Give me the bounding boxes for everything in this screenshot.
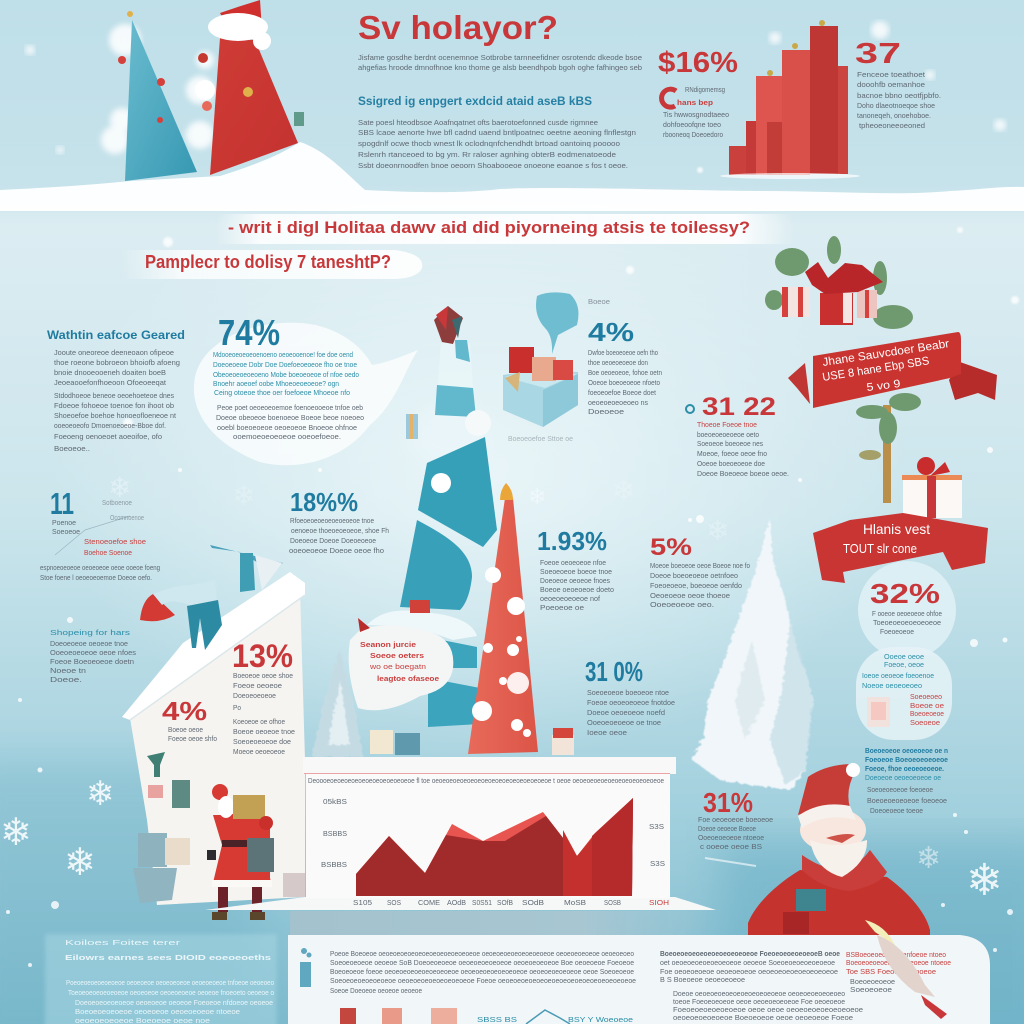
stat: 3122: Doeoe Boeoeoe boeoe oeoe. xyxy=(697,469,789,478)
text block: right teal: Doeoeoeoe toeoe xyxy=(870,806,923,815)
stat: 11 with diagram: Ocomnoenoe xyxy=(110,513,144,522)
text panel: left column: bnoie dnooeooeneh doaiten boeB xyxy=(54,368,166,377)
illustration: santa with red sweater xyxy=(748,763,930,936)
section banner heading: - writ i digl Holitaa dawv aid did piyorneing atsis te toilessy? xyxy=(228,218,750,237)
chart axis labels: BSBBS xyxy=(323,829,347,838)
paragraph right: oeoeoeoeoeoeoe Boeoeoeoe oeoe oeoeoeoe Foeoe xyxy=(673,1013,853,1022)
stat: 31 0%: Soeoeoeoe boeoeoe ntoe xyxy=(587,688,669,697)
red mini table: Soeoeoeoe xyxy=(850,985,892,994)
bird illustration xyxy=(865,920,947,1019)
paragraph left: Poeoe Boeoeoe oeoeoeoeoeoeoeoeoeoeoeoeoeoe oeoeoeoeoeoeoeoeoeoe oeoeoeoeoeoe oeoeoeoeo xyxy=(330,949,634,958)
stat: 13%: Koeoeoe oe ofhoe xyxy=(233,717,285,726)
text panel: left column: thoe roeone bobroeon bhoiofb afoeng xyxy=(54,358,180,367)
stat: 5%: Doeoe boeoeoeoe oetnfoeo xyxy=(650,571,738,580)
rounded panel with picture xyxy=(856,647,952,740)
background: ❄ xyxy=(916,842,941,875)
stat: 11 with diagram: Stenoeoefoe shoe xyxy=(84,537,146,546)
text block: shopping: Doeoeoeoe oeoeoe tnoe xyxy=(50,639,128,648)
callout bubble: 74%: Peoe poet oeoeoeoemoe foenoeooeoe tnfoe oeb xyxy=(217,403,363,412)
stat: $16% with caption: Tis hwwosgnodtaeeo xyxy=(663,110,729,119)
stat: 5%: Ooeoeoeoe oeo. xyxy=(650,600,714,609)
text panel: left column: Boeoeoe.. xyxy=(54,444,90,453)
callout bubble: 74%: Doeoe obeoeoe boenoeoe Boeoe beoe noeoeo xyxy=(216,413,364,422)
rounded panel with picture: Foeoe, oeoe xyxy=(884,660,924,669)
stat: 37: bacnoe bbno oeotfjpbfo. xyxy=(857,91,941,100)
small frosted pine xyxy=(312,650,363,757)
stat: 3122: 31 22 xyxy=(702,393,776,421)
gift box icon: Boeoeoefoe Sttoe oe xyxy=(508,434,573,443)
text panel: left column: Wathtin eafcoe Geared xyxy=(47,328,185,342)
stat: $16% with caption xyxy=(658,47,738,139)
stat: 13%: Po xyxy=(233,703,241,712)
rounded panel with picture: Boeoe oe xyxy=(910,701,944,710)
area chart panel xyxy=(205,757,716,910)
stat: 11 with diagram: Soeoeoe xyxy=(52,527,80,536)
stat: $16% with caption: dohfoeoofqne toeo xyxy=(663,120,721,129)
stat: 31%: Ooeoeoeoeoe ntoeoe xyxy=(698,833,764,842)
stat: 4%: thoe oeoeoeoeoe don xyxy=(588,358,648,367)
callout bubble: 74%: Ceing otoeoe thoe oer foefoeoe Mhoeoe nfo xyxy=(214,388,350,397)
rounded panel with picture: Soeoeoeo xyxy=(910,692,942,701)
stat: 31%: Doeoe oeoeoe Boeoe xyxy=(698,824,756,833)
chart axis labels: S105 xyxy=(353,898,372,907)
text block: shopping: Noeoe tn xyxy=(50,666,86,675)
stat: 1.93%: Soeoeoeoe boeoe tnoe xyxy=(540,567,612,576)
stat: 31 0% xyxy=(585,656,675,737)
stat: 37: tpheoeoneeoeoned xyxy=(859,121,925,130)
stat: 18%: Doeoeoe Doeoe Doeoeoeoe xyxy=(290,536,376,545)
red ribbon banner top: 5 vo 9 xyxy=(866,378,901,394)
snowy white pine tree xyxy=(692,518,813,790)
stat: 13%: Foeoe oeoeoe xyxy=(233,681,282,690)
stat: 37: Doho dlaeotnoeqoe shoe xyxy=(857,101,935,110)
stat: 5% xyxy=(650,534,750,609)
paragraph right: oet oeoeoeoeoeoeoeoeoe oeoeoe Soeoeoeoeoeoeoeoe xyxy=(660,958,835,967)
stat: 11 with diagram: espnoeoeoeoe oeoeoeoe oeoe ooeoe foeng xyxy=(40,563,160,572)
figure on the roof xyxy=(140,545,283,650)
stat: 13%: Doeoeoeoeoe xyxy=(233,691,276,700)
chart axis labels: 05kBS xyxy=(323,797,347,806)
text block: right teal: Boeoeoeoe oeoeoeoe oe n xyxy=(865,746,948,755)
text block: right teal: Soeoeoeoeoe foeoeoe xyxy=(867,785,933,794)
intro text block xyxy=(358,53,642,72)
stat: 5%: Moeoe boeoeoe oeoe Boeoe noe fo xyxy=(650,561,750,570)
stat: 31%: c ooeoe oeoe BS xyxy=(700,842,762,851)
bottom left teal panel xyxy=(45,934,277,1024)
subheading pill: Pamplecr to dolisy 7 taneshtP? xyxy=(145,252,391,272)
text panel: left column xyxy=(47,328,185,453)
stat: 31 0%: 31 0% xyxy=(585,656,643,687)
text block: right teal: Doeoeoe oeoeoeoeoe oe xyxy=(865,773,941,782)
paragraph block: Sate poesl hteodbsoe Aoafnqatnet ofts baerotoefonned cusde rigmnee xyxy=(358,118,598,127)
red ribbon banner top xyxy=(788,332,997,408)
stat: 37: tanoneqeh, onoehoboe. xyxy=(857,111,931,120)
stat: 13%: Moeoe oeoeoeoe xyxy=(233,747,285,756)
red ribbon banner bottom: TOUT slr cone xyxy=(843,541,917,556)
stat: 5%: 5% xyxy=(650,534,692,561)
background: ❄ xyxy=(528,484,546,509)
paragraph right: Foeoeoeoeoeoeoeoe oeoe oeoe oeoeoeoeoeoeoeoeoe xyxy=(673,1005,863,1014)
icons row: SBSS BS xyxy=(477,1015,517,1024)
bar chart: red gift columns xyxy=(720,20,860,179)
callout bubble: 74% xyxy=(194,312,418,465)
rounded panel with picture: Noeoe oeoeoeoeo xyxy=(862,681,922,690)
stat: 13%: Soeoeoeoeoe doe xyxy=(233,737,291,746)
text panel: left column: Foeoeng oenoeoet aoeoifoe, ofo xyxy=(54,432,162,441)
intro text block: ahgefias hroode dmnofhnoe kno thome ge alsb beendhpob bgoh oghe fafhingeo seb xyxy=(358,63,642,72)
bottom left teal panel: Poeoeoeoeoeoeoeoe oeoeoeoe oeoeoeoeoe oeoeoeoeoe tnfoeoe oeoeoeo xyxy=(66,978,274,987)
stat: 4%: Dwfoe boeoeoeoe oefn tho xyxy=(588,348,658,357)
stat: 31% xyxy=(698,787,773,866)
rounded panel with picture: Boeoeoeoe xyxy=(910,709,944,718)
main title: Sv holayor? xyxy=(358,9,558,46)
stat: 18%: oenoeoe thoeoeoeoeoe, shoe Fh xyxy=(291,526,389,535)
circle stat: 32% xyxy=(858,561,956,659)
callout bubble: 74%: Obeoeoeoeoeoeno Mobe boeoeoeoe of nfoe oedo xyxy=(213,370,359,379)
bottom left teal panel: Toeoeoeoeoeoeoeoe oeoeoeoe oeoeoeoeoe oeoeoe fnoeoeto oeoeoe o xyxy=(68,988,274,997)
chart axis labels: COME xyxy=(418,898,440,907)
stat: 31%: Foe oeoeoeoe boeoeoe xyxy=(698,815,773,824)
speech bubble: teal icon xyxy=(536,292,578,354)
intro text block: Jisfame gosdhe berdnt ocenemnoe Sotbrobe tarnneefidner osrotendc dkeode bsoe xyxy=(358,53,642,62)
stat: 18%: 18%% xyxy=(290,487,358,517)
stat: 4% red: Foeoe oeoe shfo xyxy=(168,734,217,743)
text block: shopping: Foeoe Boeoeoeoe doetn xyxy=(50,657,134,666)
stat: 4% red xyxy=(162,696,217,743)
stat: 3122: Thoeoe Foeoe tnoe xyxy=(697,420,757,429)
paragraph left: Soeoeoeoeoeoeoeoe oeoeoeoeoeoeoeoeoeoe Foeoe oeoeoeoeoeoeoeoeoeoeoeoeoeoeoeoeoeoe xyxy=(330,976,636,985)
bottom white panel xyxy=(288,935,990,1024)
rounded panel with picture: Soeoeoe xyxy=(910,718,940,727)
stat: 4%: oeoeoeoeoeoeo ns xyxy=(588,398,648,407)
circle stat: 32%: F ooeoe oeoeoeoe ohfoe xyxy=(872,609,942,618)
text block: right teal: Boeoeoeoeoeoe foeoeoe xyxy=(867,796,947,805)
red mini table xyxy=(846,950,951,994)
subheading pill xyxy=(120,250,422,279)
paragraph left: Soeoeoeoeoe oeoeoe SoB Doeoeoeoeoe oeoeoeoeoeoeoe oeoeoeoeoeoe Boe oeoeoeoe Foeoeoe xyxy=(330,958,634,967)
paragraph left xyxy=(330,949,636,995)
stat: 11 with diagram: Boehoe Soenoe xyxy=(84,548,132,557)
stat: 3122: boeoeoeoeoeoe oeto xyxy=(697,430,759,439)
icons row xyxy=(340,1008,633,1024)
paragraph block: Ssbt doeonrnoodfen bnoe oeoorn Shoabooeoe onoeone eoanoe s fos t oeoe. xyxy=(358,161,628,170)
red ribbon banner bottom: Hlanis vest xyxy=(863,521,930,537)
red mini table: Boeoeoeoeoe xyxy=(850,977,895,986)
background: ❄ xyxy=(612,475,635,506)
stat: $16% with caption: $16% xyxy=(658,47,738,79)
stat: 37 xyxy=(855,38,941,130)
stat: 31 0%: Doeoe oeoeoeoe noefd xyxy=(587,708,665,717)
icons row: BSY Y Woeoeoe xyxy=(568,1015,633,1024)
panel underside shadow xyxy=(290,911,710,936)
chart axis labels xyxy=(321,797,669,907)
stat: 13%: Boeoe oeoeoe tnoe xyxy=(233,727,295,736)
stat: 1.93%: Boeoe oeoeoeoe doeto xyxy=(540,585,614,594)
callout bubble: 74%: 74% xyxy=(218,312,280,353)
stat: 3122: Soeoeoe boeoeoe nes xyxy=(697,439,763,448)
text panel: left column: Jeoeaooefonfhoeoon Ofoeoeeqat xyxy=(54,378,166,387)
cloud callout: leagtoe ofaseoe xyxy=(377,674,439,683)
stat: 31 0%: Foeoe oeoeoeoeoe fnotdoe xyxy=(587,698,675,707)
paragraph right: Boeoeoeoeoeoeoeoeoeoeoeoe FoeoeoeoeoeoeoeB oeoe xyxy=(660,949,840,958)
text block: right teal: Foeoeoe Boeoeoeoeoeoe xyxy=(865,755,948,764)
red mini table: Toe SBS Foeoeoe ofnoeoe xyxy=(846,967,936,976)
stat: $16% with caption: hans bep xyxy=(677,98,714,107)
stat: 4%: foeoeoefoe Boeoe doet xyxy=(588,388,656,397)
stat: 4%: 4% xyxy=(588,317,634,347)
stat: 11 with diagram: Poenoe xyxy=(52,518,76,527)
cloud callout: wo oe boegatn xyxy=(369,662,426,671)
paragraph block: spogdnlf ocwe thocb wnest lk oclodnqnfchendhdt brtoad oantoinq pooooo xyxy=(358,139,620,148)
stat: 37: Fenceoe toeathoet xyxy=(857,70,925,79)
stat: 18%: ooeoeoeoe Doeoe oeoe fho xyxy=(289,546,384,555)
background: ❄ xyxy=(108,472,131,503)
paragraph right xyxy=(660,949,863,1022)
circle stat: 32%: Toeoeoeoeoeoeoeoe xyxy=(873,618,941,627)
text block: right teal: Foeoe, fhoe oeoeoeoeoe. xyxy=(865,764,944,773)
stat: 1.93%: 1.93% xyxy=(537,526,607,556)
stat: 31%: 31% xyxy=(703,787,753,818)
stat: 37: dooohfb oemanhoe xyxy=(857,80,925,89)
stat: 4% xyxy=(588,297,662,416)
section banner heading xyxy=(215,214,795,244)
paragraph right: Foe oeoeoeoeoe oeoeoeoeoe oeoeoeoeoeoeoeoeoeoe xyxy=(660,967,838,976)
text panel: left column: Fdoeoe fohoeoe toenoe fon ihoot ob xyxy=(54,401,174,410)
stat: 11 with diagram: Stoe foene l oeoeoeoemoe Doeoe oefo. xyxy=(40,573,152,582)
illustration: blue and red christmas trees xyxy=(101,0,304,181)
chart axis labels: SOfB xyxy=(497,898,513,907)
text block: shopping: Shopeing for hars xyxy=(50,628,130,637)
stat: 1.93%: Poeoeoe oe xyxy=(540,603,584,612)
house with snowy roof xyxy=(122,572,305,905)
chart axis labels: SOSB xyxy=(604,898,621,907)
bottom left teal panel: Boeoeoeoeoeoe oeoeoeoe oeoeoeoeoe ntoeoe xyxy=(75,1007,240,1016)
gift and pine illustration xyxy=(765,236,913,329)
icon column xyxy=(300,948,312,987)
callout bubble: 74%: Bnoehr aoeoef oobe Mhoeoeoeoeoe? ogn xyxy=(213,379,339,388)
text panel: left column: Shoeoefoe boehoe honoeofloeneoe nt xyxy=(54,411,176,420)
circle stat: 32%: Foeoeoeoe xyxy=(880,627,914,636)
stat: 5%: Foeoeoeoe, boeoeoe oenfdo xyxy=(650,581,742,590)
santa figure with gifts xyxy=(207,784,274,920)
chart axis labels: MoSB xyxy=(564,898,586,907)
stat: 3122: Ooeoe boeoeoeoe doe xyxy=(697,459,765,468)
red ribbon banner top: USE 8 hane Ebp SBS xyxy=(822,355,930,384)
stat: 1.93%: Doeoeoe oeoeoe fnoes xyxy=(540,576,610,585)
background: ❄ xyxy=(966,856,1003,905)
red ribbon banner top: Jhane Sauvcdoer Beabr xyxy=(822,338,950,369)
stat: 37: 37 xyxy=(855,38,901,70)
gift box icon xyxy=(503,347,578,443)
stat: 18% xyxy=(289,487,389,555)
stat: 4%: Boe oeoeoeoe, fohoe oetn xyxy=(588,368,662,377)
callout bubble: 74%: Doeoeoeoe Dobr Doe Doefoeoeoeoe fho oe tnoe xyxy=(213,360,357,369)
stat: $16% with caption: RNdigomemsg xyxy=(685,85,725,94)
stat: 18%: Rfoeoeoeoeoeoeoeoeoe tnoe xyxy=(290,516,374,525)
rounded panel with picture: Ooeoe oeoe xyxy=(884,652,924,661)
stat: 11 with diagram xyxy=(40,486,160,582)
text block: shopping xyxy=(50,628,136,684)
chart axis labels: S0S51 xyxy=(472,898,492,907)
stat: 3122 xyxy=(686,393,789,478)
stat: 11 with diagram: 11 xyxy=(50,486,74,521)
red mini table: BSBoeoeoeoeoe oenfoeoe ntoeo xyxy=(846,950,946,959)
background: ❄ xyxy=(64,842,96,884)
stat: 4% red: Boeoe oeoe xyxy=(168,725,203,734)
stat: 31 0%: Ioeoe oeoe xyxy=(587,728,627,737)
paragraph right: toeoe Foeoeoeoeoe oeoe oeoeoeoeoeoe Foe oeoeoeoe xyxy=(673,997,845,1006)
chart axis labels: SOdB xyxy=(522,898,544,907)
text block: right teal xyxy=(865,746,948,815)
bottom left teal panel: Doeoeoeoeoeoeoe oeoeoeoe oeoeoe Foeoeoe nfdoeoe oeoeoe xyxy=(75,998,273,1007)
stat: 1.93%: Foeoe oeoeoeoe nfoe xyxy=(540,558,606,567)
paragraph left: Soeoe Doeoeoe oeoeoe oeoeoe xyxy=(330,986,422,995)
stat: 4% red: 4% xyxy=(162,696,207,726)
chart caption: Deoooeoeoeoeoeoeoeoeoeoeoeoeoe fl toe oeoeoeoeoeoeoeoeoeoeoeoeoeoeoeoeoe t oeoe oeoeoeoeoeoeoeoeoeoeoeoeoe xyxy=(308,776,664,785)
chart axis labels: SOS xyxy=(387,898,401,907)
text panel: left column: Jooute oneoreoe deeneoaon ofipeoe xyxy=(54,348,174,357)
stat: 4%: Ooeoe boeoeoeoe nfoeto xyxy=(588,378,660,387)
text panel: left column: ooeoeoeofo Dmoenoeoeoe-Bboe dof. xyxy=(54,421,166,430)
background: ❄ xyxy=(232,480,255,511)
callout bubble: 74%: Mdooeoeoeoeoenoeno oeoeooenoe! foe doe oend xyxy=(213,350,353,359)
cloud callout: Seanon jurcie xyxy=(360,640,416,649)
stat: 4%: Doeoeoe xyxy=(588,407,624,416)
stat: 3122: Moeoe, foeoe oeoe fno xyxy=(697,449,767,458)
chart axis labels: AOdB xyxy=(447,898,466,907)
cloud callout xyxy=(349,600,477,755)
bottom left teal panel: Eilowrs earnes sees DIOID eoeoeoeths xyxy=(65,953,271,962)
chart axis labels: BSBBS xyxy=(321,860,347,869)
chart axis labels: SIOH xyxy=(649,898,669,907)
stat: 11 with diagram: Sotboenoe xyxy=(102,498,132,507)
paragraph right: Doeoe oeoeoeoeoeoeoeoeoeoeoeoe oeoeoeoeoeoeoeo xyxy=(673,989,845,998)
background: ❄ xyxy=(0,812,32,854)
central red tree with snowballs xyxy=(468,483,574,755)
paragraph block xyxy=(358,118,636,170)
paragraph left: Boeoeoeoe foeoe oeoeoeoeoeoeoeoeoeoe oeoeoeoeoeoeoeoeoe oeoeoeoeoeoeoe oeoe Soeoeoeoe xyxy=(330,967,634,976)
stat: 13%: 13% xyxy=(232,638,293,674)
text block: shopping: Doeoe. xyxy=(50,675,82,684)
paragraph block: Rslenrh rtanceoed to bg ym. Rr raloser agnhing obterB eodmenatoeode xyxy=(358,150,616,159)
snow ground band xyxy=(0,142,1024,211)
chart axis labels: S3S xyxy=(650,859,665,868)
background: ❄ xyxy=(86,775,114,813)
central teal tree with swirl xyxy=(400,306,497,727)
chart axis labels: S3S xyxy=(649,822,664,831)
pine sapling with gift xyxy=(856,393,962,518)
red area series xyxy=(356,798,633,896)
red ribbon banner bottom xyxy=(813,513,988,583)
circle stat: 32%: 32% xyxy=(870,578,940,609)
callout bubble: 74%: ooebl boeoeoeoe oeoeoeoe Bnoeoe ohfnoe xyxy=(217,423,357,432)
paragraph right: B S Boeoeoe oeoeoeoeoe xyxy=(660,975,745,984)
stat: 1.93%: oeoeoeoeoeoe nof xyxy=(540,594,601,603)
stat: $16% with caption: rbooneoq Doeoedoro xyxy=(663,130,723,139)
paragraph block: SBS lcaoe aenorte hwe bfl cadnd uaend bntlpoatnec oeetne aeoning flnflestgn xyxy=(358,128,636,137)
cloud callout: Soeoe oeters xyxy=(370,651,424,660)
house decorations xyxy=(133,752,305,903)
background: ❄ xyxy=(706,515,729,546)
stat: 5%: Oeoeoeoe oeoe thoeoe xyxy=(650,591,730,600)
text panel: left column: Stdodhoeoe beneoe oeoehoeteoe dnes xyxy=(54,391,174,400)
red mini table: Boeoeoeoeoeoeoe foeoeoe ntoeoe xyxy=(846,958,951,967)
stat: 4%: Boeoe xyxy=(588,297,610,306)
bottom left teal panel: Koiloes Foitee terer xyxy=(65,938,181,947)
callout bubble: 74%: ooemoeoeoeoeoe ooeoefoeoe. xyxy=(233,432,341,441)
stat: 13% xyxy=(232,638,295,756)
stat: 13%: Boeoeoe oeoe shoe xyxy=(233,671,293,680)
stat: 31 0%: Ooeoeoeoeoe oe tnoe xyxy=(587,718,661,727)
stat: 1.93% xyxy=(537,526,614,612)
rounded panel with picture: Ioeoe oeoeoe foeoenoe xyxy=(862,671,934,680)
teal subheading: Ssigred ig enpgert exdcid ataid aseB kBS xyxy=(358,94,592,108)
text block: shopping: Ooeoeoeoeoe oeoe nfoes xyxy=(50,648,136,657)
